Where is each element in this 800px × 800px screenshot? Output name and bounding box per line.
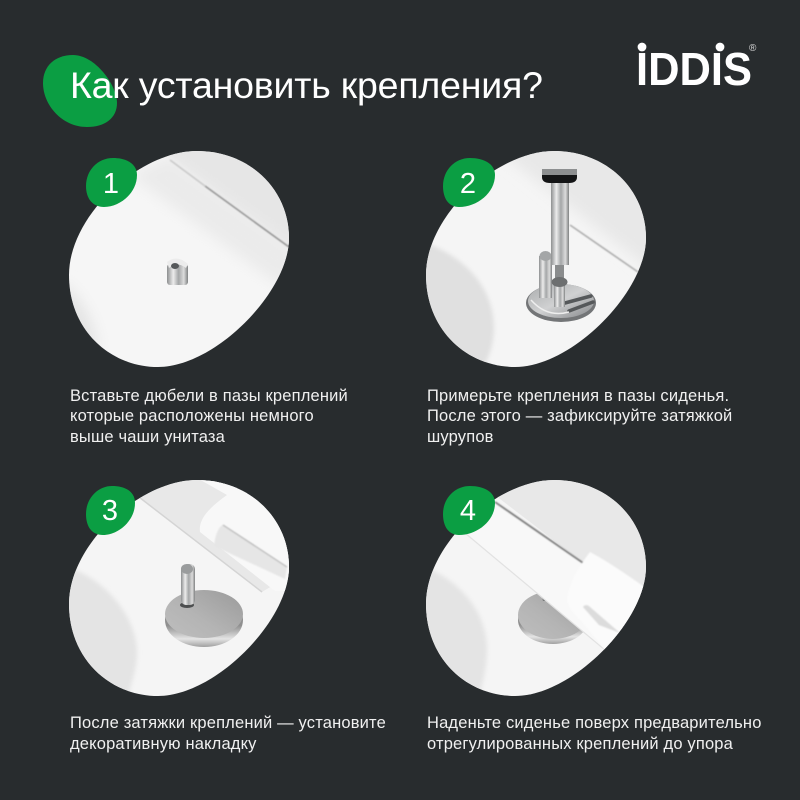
icon: mounting plate: [526, 284, 596, 322]
panel: step 4: [417, 474, 762, 753]
step 1 text: Вставьте дюбели в пазы креплений: [70, 387, 348, 405]
badge 2: [443, 158, 495, 207]
seat hinge: [582, 552, 644, 649]
icon: screw: [552, 277, 568, 307]
badge 3: 3: [102, 495, 118, 527]
icon: guide pin: [539, 251, 552, 298]
photo: screwdriver tightening mount: [426, 151, 646, 367]
seat: [538, 591, 637, 650]
badge 1: 1: [103, 168, 119, 200]
step 2 text: После этого — зафиксируйте затяжкой: [427, 407, 732, 425]
step 3 text: После затяжки креплений — установите: [70, 714, 386, 732]
photo: seat placed over mounts: [426, 480, 646, 696]
step 2 text: шурупов: [427, 428, 494, 446]
icon: screwdriver: [542, 169, 577, 280]
step 1 text: которые расположены немного: [70, 407, 314, 425]
badge 4: 4: [460, 495, 476, 527]
icon: fastener: [167, 258, 188, 285]
badge 3: [86, 486, 135, 535]
badge 1: [86, 158, 137, 207]
logo: IDDIS: IDDIS: [636, 43, 752, 95]
icon: metal disc: [165, 590, 243, 647]
photo: decorative cover with pin: [69, 480, 289, 696]
icon: metal disc under seat: [518, 594, 583, 644]
logo: IDDIS: ®: [749, 43, 757, 54]
title accent blob: [43, 55, 117, 127]
step 4 text: отрегулированных креплений до упора: [427, 735, 734, 753]
panel: step 3: [60, 469, 386, 753]
icon: pin: [180, 564, 195, 608]
panel: step 2: [417, 140, 732, 446]
badge 2: 2: [460, 168, 476, 200]
badge 4: [443, 486, 495, 535]
panel: step 1: [60, 140, 348, 446]
step 2 text: Примерьте крепления в пазы сиденья.: [427, 387, 729, 405]
photo: fastener insert in toilet surface: [69, 151, 289, 367]
step 4 text: Наденьте сиденье поверх предварительно: [427, 714, 762, 732]
step 3 text: декоративную накладку: [70, 735, 257, 753]
title: Как установить крепления?: [70, 64, 543, 106]
seat hinge: [200, 480, 289, 591]
step 1 text: выше чаши унитаза: [70, 428, 226, 446]
